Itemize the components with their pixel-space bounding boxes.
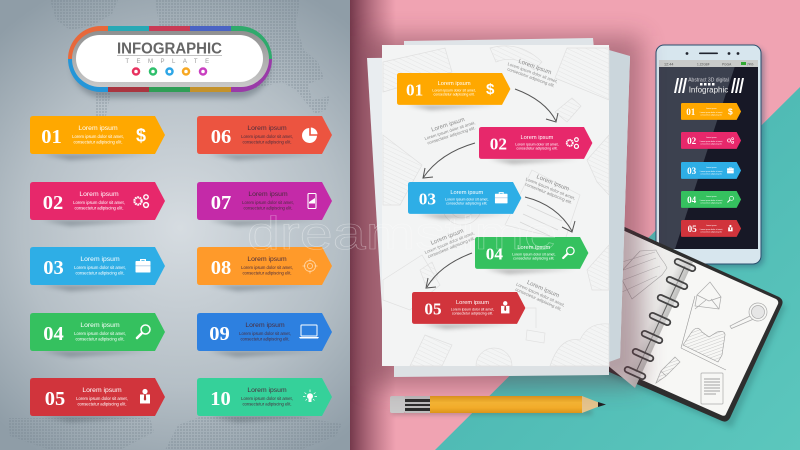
paper note: lower right: Lorem ipsum dolor sit amet, (515, 282, 566, 308)
arrow 03 to 04 (525, 197, 575, 232)
card 03 (30, 247, 165, 291)
phone card 04 (681, 191, 741, 208)
phone body (656, 45, 761, 264)
card 05: Lorem ipsum dolor sit amet, (76, 396, 128, 401)
phone card 01: consectetur adipiscing elit. (700, 113, 723, 116)
phone card 02: Lorem ipsum (706, 137, 717, 139)
paper card 03: 03 (419, 190, 436, 209)
paper card 01: Lorem ipsum dolor sit amet, (432, 88, 476, 92)
pencil (390, 396, 606, 415)
paper note: middle left: consectetur adipiscing elit. (427, 125, 476, 145)
paper card 05: consectetur adipiscing elit. (452, 312, 493, 316)
card 10: consectetur adipiscing elit. (242, 402, 292, 406)
card 10: Lorem ipsum dolor sit amet, (241, 396, 293, 401)
card 03: consectetur adipiscing elit. (75, 270, 125, 276)
status bar: PGGA (722, 62, 732, 66)
paper note: middle right: Lorem ipsum (535, 174, 570, 193)
card 07: 07 (211, 192, 231, 214)
phone card 04: Lorem ipsum (706, 196, 717, 198)
paper card 05 (412, 292, 525, 329)
card 04: Lorem ipsum (80, 322, 120, 329)
card 04: consectetur adipiscing elit. (75, 336, 125, 342)
card 02 (30, 182, 165, 226)
phone card 03: Lorem ipsum dolor sit amet, (700, 170, 723, 173)
card 06: 06 (211, 126, 231, 148)
paper card 02: Lorem ipsum (520, 135, 554, 141)
right background: pink (350, 0, 800, 450)
card 03: Lorem ipsum (80, 256, 120, 263)
right background: teal (350, 0, 800, 450)
paper card 05: Lorem ipsum dolor sit amet, (451, 307, 494, 311)
paper note: top right: Lorem ipsum (517, 59, 552, 76)
paper note: middle right: Lorem ipsum dolor sit amet, (525, 176, 576, 201)
paper note: middle left: Lorem ipsum dolor sit amet, (424, 120, 476, 141)
card 05: Lorem ipsum (82, 387, 122, 394)
paper card 04: 04 (486, 245, 503, 264)
white pill (76, 35, 263, 82)
dotted world map (8, 0, 342, 450)
phone card 04: consectetur adipiscing elit. (700, 201, 723, 204)
pencil eraser (390, 396, 405, 413)
card 09: 09 (209, 323, 230, 345)
card 01: 01 (41, 126, 62, 148)
phone card 05: Lorem ipsum (706, 225, 717, 227)
grey pill rim (72, 31, 269, 87)
card 01 (30, 116, 165, 160)
arrow 04 to 05 (426, 253, 472, 288)
paper card 01: $ (486, 81, 495, 98)
paper note: top right (505, 56, 561, 89)
paper card 04 (475, 237, 588, 274)
sketch: pencil (656, 357, 680, 383)
card 05 (30, 378, 165, 422)
sketch: document (701, 373, 723, 404)
card 05: 05 (45, 388, 65, 410)
status bar: 1.22GBF (697, 62, 710, 66)
paper card 02 (479, 127, 592, 164)
pencil wood tip (582, 396, 600, 413)
phone card 03: 03 (687, 166, 697, 176)
card 06: consectetur adipiscing elit. (242, 140, 292, 144)
phone card 02: 02 (687, 136, 697, 146)
paper card 02: 02 (490, 135, 507, 154)
paper card 04: Lorem ipsum dolor sit amet, (512, 252, 556, 256)
smartphone (656, 45, 764, 267)
phone card 02: consectetur adipiscing elit. (700, 142, 723, 145)
card 06: Lorem ipsum dolor sit amet, (241, 134, 293, 139)
card 02: 02 (43, 192, 63, 214)
phone card 03 (681, 162, 741, 179)
phone card 02: Lorem ipsum dolor sit amet, (700, 140, 723, 143)
phone card 05 (681, 220, 741, 237)
pencil body (430, 396, 582, 413)
paper card 03: Lorem ipsum (450, 190, 484, 196)
phone card 01: Lorem ipsum dolor sit amet, (700, 111, 723, 114)
phone camera and speaker (686, 52, 739, 55)
card 06: Lorem ipsum (247, 125, 287, 132)
colour dots (133, 68, 206, 74)
card 02: Lorem ipsum dolor sit amet, (73, 200, 125, 205)
phone card 03: Lorem ipsum (706, 167, 717, 169)
paper card 04: consectetur adipiscing elit. (513, 257, 554, 261)
sketch: phone (618, 250, 667, 299)
phone screen (659, 66, 758, 249)
paper note: lower right: consectetur adipiscing elit. (515, 287, 563, 312)
paper note: lower left: Lorem ipsum (430, 228, 465, 247)
card 02: Lorem ipsum (79, 191, 119, 198)
paper card 02: consectetur adipiscing elit. (516, 147, 558, 151)
phone card 05: Lorem ipsum dolor sit amet, (700, 228, 723, 231)
card 03: 03 (43, 257, 64, 279)
back sheet top (404, 38, 595, 60)
paper card 01 (397, 73, 510, 110)
paper card 02: Lorem ipsum dolor sit amet, (515, 142, 559, 146)
header badge (68, 26, 272, 98)
paper card 05: 05 (424, 300, 442, 319)
arrow 02 to 03 (423, 143, 475, 178)
spiral notebook (600, 224, 786, 428)
phone heading: Infographic (689, 86, 728, 94)
status bar: 12:44 (664, 62, 674, 66)
main sheet (382, 45, 609, 366)
phone card 03: consectetur adipiscing elit. (700, 172, 723, 175)
card 04 (30, 313, 165, 357)
paper note: middle left (422, 114, 477, 146)
card 01: Lorem ipsum dolor sit amet, (72, 134, 124, 139)
card 06 (197, 116, 332, 160)
paper note: lower left: Lorem ipsum dolor sit amet, (424, 230, 475, 255)
left background panel (0, 0, 350, 450)
pencil ferrule (405, 396, 430, 413)
pencil lead (598, 402, 606, 407)
watermark: dreamstime (247, 207, 557, 259)
card 09: Lorem ipsum dolor sit amet, (239, 331, 291, 336)
coloured pill ring (68, 26, 272, 92)
card 04: Lorem ipsum dolor sit amet, (74, 331, 126, 336)
card 09: consectetur adipiscing elit. (240, 336, 290, 342)
title: INFOGRAPHIC (117, 40, 222, 58)
sketch: envelope (695, 282, 721, 309)
paper card 01: Lorem ipsum (438, 81, 471, 87)
phone card 05: 05 (688, 224, 697, 234)
paper card 04: Lorem ipsum (517, 245, 551, 251)
phone heading (674, 78, 744, 94)
paper note: middle right (523, 171, 578, 205)
phone card 04: Lorem ipsum dolor sit amet, (700, 199, 723, 202)
card 09: Lorem ipsum (245, 322, 285, 329)
card 10: 10 (210, 388, 231, 410)
card 04: 04 (43, 323, 64, 345)
status bar: 74% (747, 62, 754, 66)
paper card 01: 01 (406, 81, 423, 100)
card 05: consectetur adipiscing elit. (77, 402, 127, 406)
phone card 04: 04 (687, 195, 697, 205)
stacked paper sheets (366, 36, 642, 386)
paper note: middle left: Lorem ipsum (431, 117, 466, 134)
paper card 05: Lorem ipsum (456, 300, 489, 306)
card 03: Lorem ipsum dolor sit amet, (74, 265, 126, 270)
sketch: magnifier (730, 303, 767, 328)
card 09 (197, 313, 332, 357)
left edge shade of pink area (350, 0, 396, 450)
card 02: consectetur adipiscing elit. (74, 206, 124, 210)
notebook page (606, 229, 778, 416)
phone heading: Abstract 3D digital (688, 78, 729, 84)
card 01: consectetur adipiscing elit. (73, 140, 123, 144)
phone card 02 (681, 132, 741, 149)
spiral rings (624, 258, 696, 380)
paper card 01: consectetur adipiscing elit. (434, 93, 475, 97)
card 01: $ (136, 126, 146, 146)
paper card 03: Lorem ipsum dolor sit amet, (445, 197, 489, 201)
card 10 (197, 378, 332, 422)
phone card 01 (681, 103, 741, 120)
paper note: lower left: consectetur adipiscing elit. (427, 235, 476, 259)
back sheet left and right (367, 56, 630, 360)
spine line (636, 266, 685, 372)
title rule (117, 54, 222, 56)
card 08: consectetur adipiscing elit. (242, 270, 292, 276)
card 08: 08 (211, 257, 231, 279)
card 07: Lorem ipsum (248, 191, 288, 198)
shaded left page (606, 229, 693, 388)
card 08: Lorem ipsum dolor sit amet, (241, 265, 293, 270)
phone card 01: $ (728, 107, 733, 117)
right sheet shade (609, 50, 630, 362)
paper note: lower right (513, 276, 568, 312)
paper note: lower left (422, 225, 477, 259)
status bar (659, 60, 758, 67)
card 08: Lorem ipsum (247, 256, 287, 263)
card 07 (197, 182, 332, 226)
paper note: top right: consectetur adipiscing elit. (507, 66, 556, 88)
sketch: area chart (681, 296, 726, 370)
phone card 01: Lorem ipsum (706, 108, 717, 110)
paper note: top right: Lorem ipsum dolor sit amet, (507, 61, 559, 84)
card 01: Lorem ipsum (78, 125, 118, 132)
screen reflection (659, 66, 735, 249)
card 07: Lorem ipsum dolor sit amet, (242, 200, 294, 205)
back sheet bottom (394, 360, 609, 377)
subtitle: TEMPLATE (125, 59, 217, 65)
notebook cover (600, 224, 783, 422)
card 07: consectetur adipiscing elit. (243, 206, 293, 210)
card 08 (197, 247, 332, 291)
paper card 03 (408, 182, 521, 219)
paper note: middle right: consectetur adipiscing elit. (524, 181, 573, 205)
card 10: Lorem ipsum (247, 387, 287, 394)
phone card 05: consectetur adipiscing elit. (700, 230, 723, 233)
arrow 01 to 02 (515, 89, 558, 122)
phone card 01: 01 (686, 107, 696, 117)
sketches on main sheet (383, 46, 609, 366)
paper card 03: consectetur adipiscing elit. (446, 202, 487, 206)
paper note: lower right: Lorem ipsum (526, 280, 560, 299)
